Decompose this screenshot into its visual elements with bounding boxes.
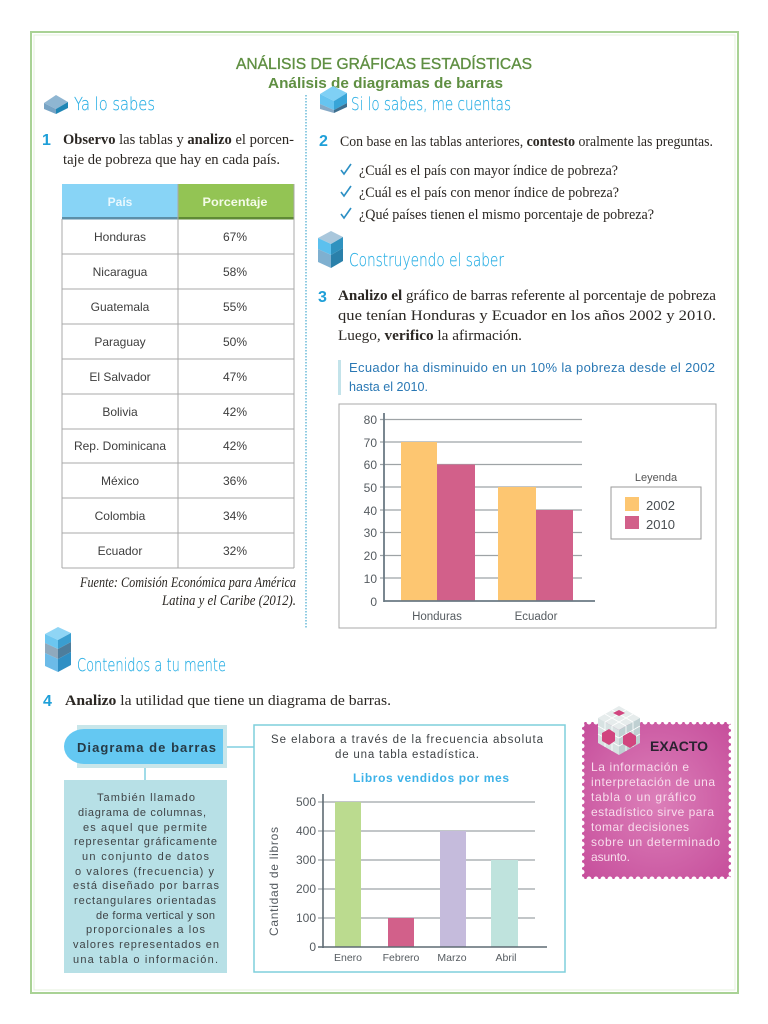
table: poverty by country: 58% <box>223 265 247 279</box>
definition box: proporcionales a los <box>86 924 206 936</box>
heading: Si lo sabes, me cuentas: Si lo sabes, me cuentas <box>351 94 511 115</box>
chart title: Libros vendidos por mes <box>353 771 509 785</box>
axis labels: Ecuador <box>515 611 558 623</box>
source note: Fuente: Comisión Económica para América <box>79 575 296 591</box>
axis labels <box>267 795 517 964</box>
legend: 2002 <box>646 498 675 513</box>
panel: books sold chart <box>254 725 565 972</box>
exercise 3 text: que tenían Honduras y Ecuador en los años 2002 y 2010. <box>338 308 716 324</box>
axis labels: 0 <box>370 595 377 609</box>
bar chart: Honduras and Ecuador <box>339 404 716 628</box>
definition box: un conjunto de datos <box>82 851 210 863</box>
axis labels: Cantidad de libros <box>267 827 281 936</box>
table: poverty by country <box>62 184 294 568</box>
axis labels: Enero <box>334 952 362 964</box>
exercise 1 text: Observo las tablas y analizo el porcen- <box>63 132 294 148</box>
axis labels: 70 <box>364 436 377 450</box>
exercise 2 text: 2 <box>319 133 328 150</box>
icon: flat blue brick <box>44 95 68 114</box>
axis labels: Marzo <box>437 952 467 964</box>
table: poverty by country: Guatemala <box>91 300 150 314</box>
callout: Exacto <box>582 706 731 879</box>
exercise 2 text: Con base en las tablas anteriores, contesto oralmente las preguntas. <box>340 134 713 150</box>
table: poverty by country: Paraguay <box>94 335 146 349</box>
bars <box>401 442 573 601</box>
table: poverty by country: 42% <box>223 405 247 419</box>
exercise 3 text: 3 <box>318 289 327 306</box>
definition box: rectangulares orientadas <box>74 895 216 907</box>
axis labels: 20 <box>364 549 377 563</box>
heading: Construyendo el saber <box>318 231 504 271</box>
definition box <box>64 780 227 973</box>
title: Análisis de diagramas de barras <box>268 76 503 92</box>
heading: Construyendo el saber: Construyendo el saber <box>349 250 504 271</box>
heading: Si lo sabes, me cuentas <box>320 86 511 115</box>
axis labels: 300 <box>296 853 316 867</box>
definition box: valores representados en <box>73 939 219 951</box>
axis labels: 50 <box>364 481 377 495</box>
table: poverty by country: El Salvador <box>89 370 151 384</box>
definition box: es aquel que permite <box>83 822 207 834</box>
axis labels: 0 <box>309 940 316 954</box>
axis labels: Abril <box>495 952 517 964</box>
title <box>236 54 532 92</box>
axis labels: 200 <box>296 882 316 896</box>
exercise 3 text: Analizo el gráfico de barras referente al porcentaje de pobreza <box>338 288 717 304</box>
table: poverty by country: 55% <box>223 300 247 314</box>
definition box: está diseñado por barras <box>73 880 220 892</box>
callout: Exacto: EXACTO <box>650 738 708 754</box>
table: poverty by country: 34% <box>223 509 247 523</box>
legend: 2010 <box>646 517 675 532</box>
table: poverty by country: Porcentaje <box>202 195 268 209</box>
icon: two-layer brick <box>320 86 347 113</box>
exercise 1 text: taje de pobreza que hay en cada país. <box>63 152 280 168</box>
statement quote <box>338 360 715 395</box>
table: poverty by country: Colombia <box>95 509 146 523</box>
icon: tall stacked brick <box>45 627 71 672</box>
definition box: diagrama de columnas, <box>78 807 206 819</box>
table: poverty by country: 50% <box>223 335 247 349</box>
table: poverty by country: 67% <box>223 230 247 244</box>
axis labels: 100 <box>296 911 316 925</box>
axis labels: 400 <box>296 824 316 838</box>
checklist of questions: ¿Qué países tienen el mismo porcentaje de pobreza? <box>359 207 654 223</box>
definition box: una tabla o información. <box>73 954 218 966</box>
source note <box>79 575 296 609</box>
icon: stacked brick <box>318 231 343 268</box>
callout: Exacto: interpretación de una <box>591 775 715 789</box>
definition box: representar gráficamente <box>74 836 217 848</box>
heading: Ya lo sabes <box>44 94 155 115</box>
definition box: o valores (frecuencia) y <box>75 866 214 878</box>
table: poverty by country: 47% <box>223 370 247 384</box>
axis labels <box>364 413 558 623</box>
heading: Contenidos a tu mente <box>45 627 226 676</box>
checklist of questions: ¿Cuál es el país con mayor índice de pobreza? <box>359 163 618 179</box>
table: poverty by country: Honduras <box>94 230 146 244</box>
axis labels: 40 <box>364 504 377 518</box>
divider between columns <box>305 95 307 628</box>
source note: Latina y el Caribe (2012). <box>161 593 296 609</box>
panel: books sold chart: Se elabora a través de la frecuencia absoluta <box>271 734 544 746</box>
heading: Ya lo sabes: Ya lo sabes <box>74 94 155 115</box>
exercise 4 text: 4 <box>43 693 52 710</box>
table: poverty by country: País <box>108 195 133 209</box>
axis labels: Honduras <box>412 611 462 623</box>
axis labels: Febrero <box>383 952 420 964</box>
legend: Leyenda <box>635 472 678 484</box>
table: poverty by country: 32% <box>223 544 247 558</box>
title: ANÁLISIS DE GRÁFICAS ESTADÍSTICAS <box>236 54 532 73</box>
checklist of questions: ¿Cuál es el país con menor índice de pobreza? <box>359 185 619 201</box>
icon: white cube <box>598 706 640 755</box>
concept label: Diagrama de barras: Diagrama de barras <box>77 740 216 755</box>
axis labels: 500 <box>296 795 316 809</box>
table: poverty by country: 42% <box>223 439 247 453</box>
exercise 3 text: Luego, verifico la afirmación. <box>338 328 522 344</box>
exercise 4 text: Analizo la utilidad que tiene un diagrama de barras. <box>65 693 391 709</box>
callout: Exacto: tomar decisiones <box>591 820 689 834</box>
axis labels: 80 <box>364 413 377 427</box>
panel: books sold chart: de una tabla estadística. <box>335 749 479 761</box>
table: poverty by country: 36% <box>223 474 247 488</box>
axis labels: 60 <box>364 458 377 472</box>
statement quote: Ecuador ha disminuido en un 10% la pobreza desde el 2002 <box>349 360 715 375</box>
bars <box>335 802 518 947</box>
definition box: También llamado <box>97 792 195 804</box>
exercise 1 text: 1 <box>42 132 51 149</box>
checklist of questions <box>341 163 654 223</box>
exercise 1 text <box>42 132 294 168</box>
concept label: Diagrama de barras <box>64 725 227 768</box>
table: poverty by country: Ecuador <box>98 544 142 558</box>
statement quote: hasta el 2010. <box>349 379 428 394</box>
axis labels: 30 <box>364 526 377 540</box>
definition box: de forma vertical y son <box>96 910 215 922</box>
axis labels: 10 <box>364 572 377 586</box>
heading: Contenidos a tu mente: Contenidos a tu mente <box>77 655 226 676</box>
table: poverty by country: Rep. Dominicana <box>74 439 166 453</box>
exercise 3 text <box>318 288 717 344</box>
callout: Exacto: estadístico sirve para <box>591 805 714 819</box>
table: poverty by country: Bolivia <box>102 405 138 419</box>
callout: Exacto: sobre un determinado <box>591 835 720 849</box>
table: poverty by country: Nicaragua <box>93 265 148 279</box>
callout: Exacto: tabla o un gráfico <box>591 790 696 804</box>
table: poverty by country: México <box>101 474 139 488</box>
callout: Exacto: asunto. <box>591 850 630 864</box>
legend <box>611 472 701 539</box>
callout: Exacto: La información e <box>591 760 689 774</box>
